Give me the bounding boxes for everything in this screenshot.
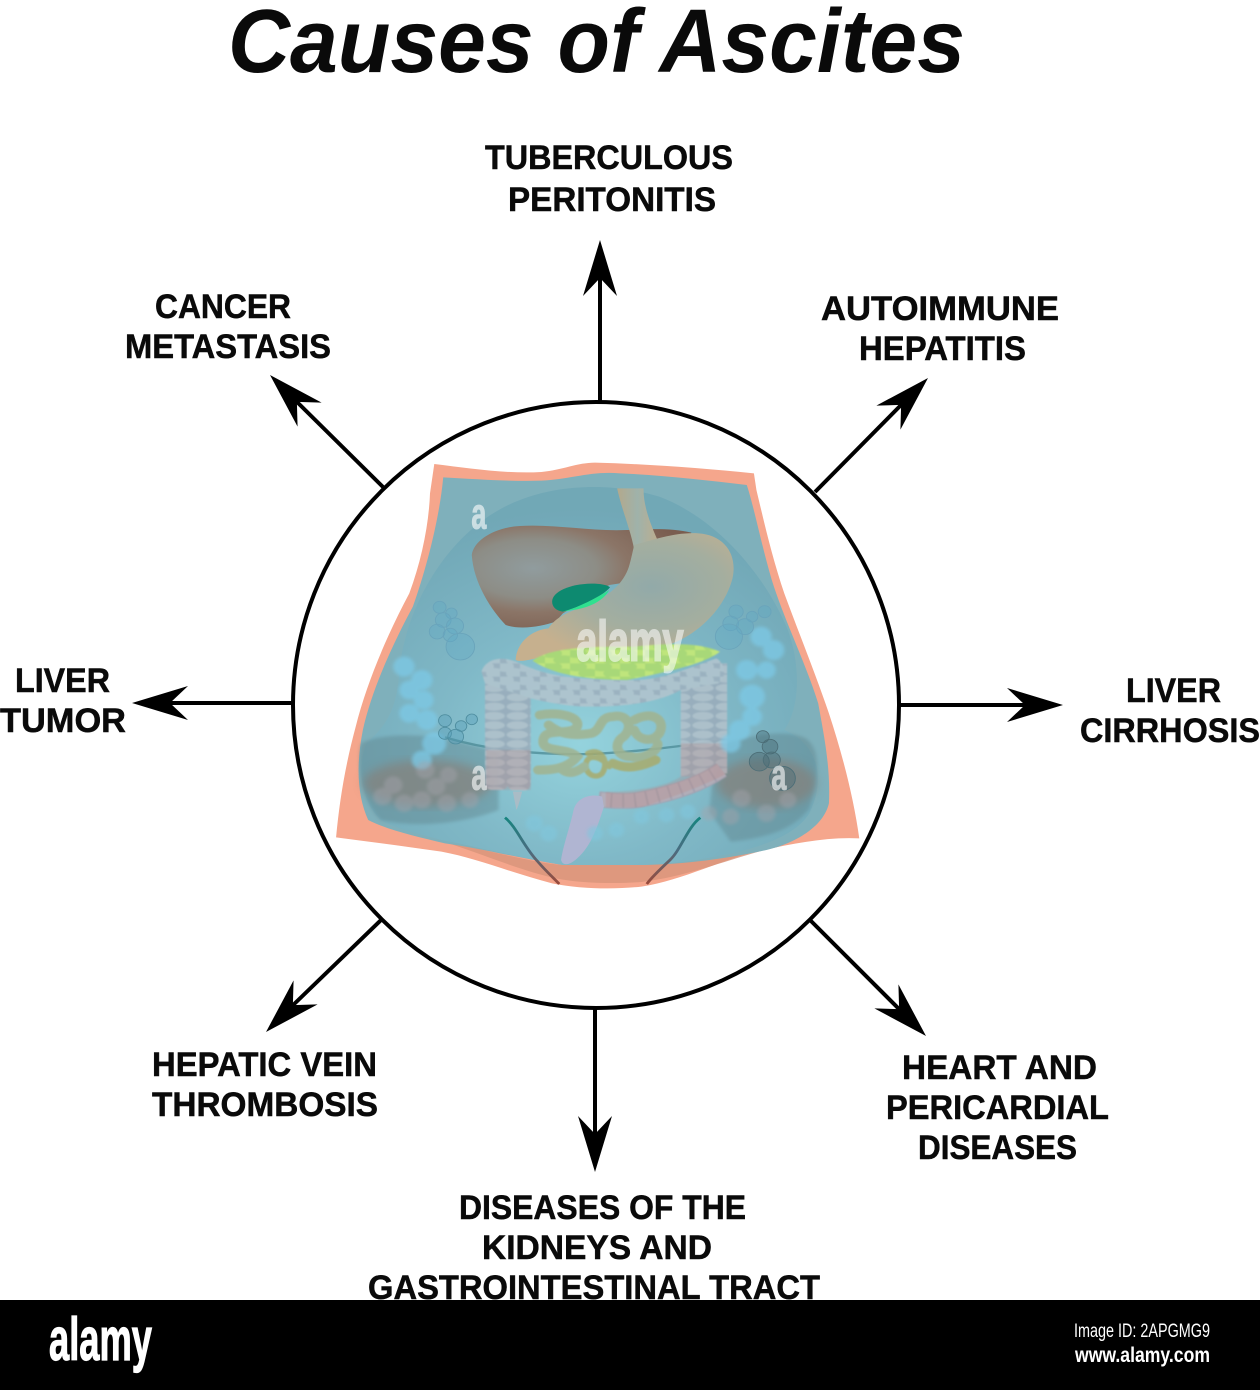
label: tuberculous peritonitis [485,139,733,219]
transverse colon [481,658,724,707]
label: liver tumor: TUMOR [0,702,126,740]
stomach [516,533,734,661]
colon [481,658,727,807]
right lower shaded lobe [709,733,817,842]
descending colon [599,663,727,801]
abdomen illustration [336,463,859,888]
label: hepatic vein thrombosis: HEPATIC VEIN [152,1046,377,1084]
watermark: lower-left a: a [471,750,487,799]
watermark: alamy: alamy [576,610,684,673]
footer bar [0,1300,1260,1390]
central circle [293,402,899,1008]
label: heart and pericardial diseases [886,1049,1109,1167]
small intestine [538,714,661,776]
image id: Image ID: 2APGMG9 [1074,1321,1210,1342]
left lower shaded lobe [359,735,499,824]
label: diseases of the kidneys and gastrointestinal tract: GASTROINTESTINAL TRACT [368,1269,820,1307]
outlined bubbles: upper left [429,601,475,660]
label: diseases of the kidneys and gastrointestinal tract: KIDNEYS AND [482,1229,712,1267]
right ureter tube [647,818,700,884]
watermark: lower-right a: a [771,750,787,799]
label: autoimmune hepatitis: HEPATITIS [859,330,1026,368]
liver [472,526,691,627]
arrow: up [583,240,617,402]
label: liver cirrhosis: LIVER [1126,672,1221,710]
lower fat globules [373,761,796,825]
left ureter tube [505,818,559,884]
label: cancer metastasis: CANCER [155,288,291,326]
footer logo: alamy [49,1306,152,1373]
right soft bubbles [721,627,784,753]
website: www.alamy.com [1074,1344,1210,1367]
label: cancer metastasis [125,288,331,366]
arrow: lower right [810,920,938,1048]
label: tuberculous peritonitis: TUBERCULOUS [485,139,733,177]
arrow: upper right [815,366,940,492]
label: tuberculous peritonitis: PERITONITIS [508,181,716,219]
outlined bubbles: upper right [715,605,771,649]
label: diseases of the kidneys and gastrointestinal tract: DISEASES OF THE [459,1189,746,1227]
label: diseases of the kidneys and gastrointestinal tract [368,1189,820,1307]
bottom pale bubbles [526,804,696,841]
ascending colon [485,667,531,791]
appendix [513,792,522,810]
darker skin under fluid [438,840,777,883]
rectum [561,795,604,864]
gallbladder [552,584,610,612]
arrow: down [578,1008,612,1172]
outlined bubbles: lower right [749,731,795,790]
label: autoimmune hepatitis [821,290,1059,368]
label: autoimmune hepatitis: AUTOIMMUNE [821,290,1059,328]
label: heart and pericardial diseases: PERICARDIAL [886,1089,1109,1127]
esophagus [617,488,657,550]
label: liver tumor [0,662,126,740]
label: cancer metastasis: METASTASIS [125,328,331,366]
arrow: upper left [258,363,383,487]
arrow: right [900,688,1063,722]
label: hepatic vein thrombosis [152,1046,378,1124]
watermark: top-left a: a [471,489,487,538]
label: liver cirrhosis [1080,672,1260,750]
pancreas [532,644,720,680]
fluid level line [445,737,725,754]
arrow: lower left [254,920,381,1044]
peritoneal dome [361,487,818,865]
arrow: left [132,686,292,720]
label: liver tumor: LIVER [15,662,110,700]
outlined bubbles: mid left [439,714,477,744]
label: hepatic vein thrombosis: THROMBOSIS [152,1086,378,1124]
label: heart and pericardial diseases: DISEASES [918,1129,1077,1167]
reddish lower colon tint [486,743,727,807]
left soft bubbles [393,657,446,769]
label: heart and pericardial diseases: HEART AND [902,1049,1097,1087]
fluid outer layer [359,473,829,865]
skin outline [336,463,859,888]
